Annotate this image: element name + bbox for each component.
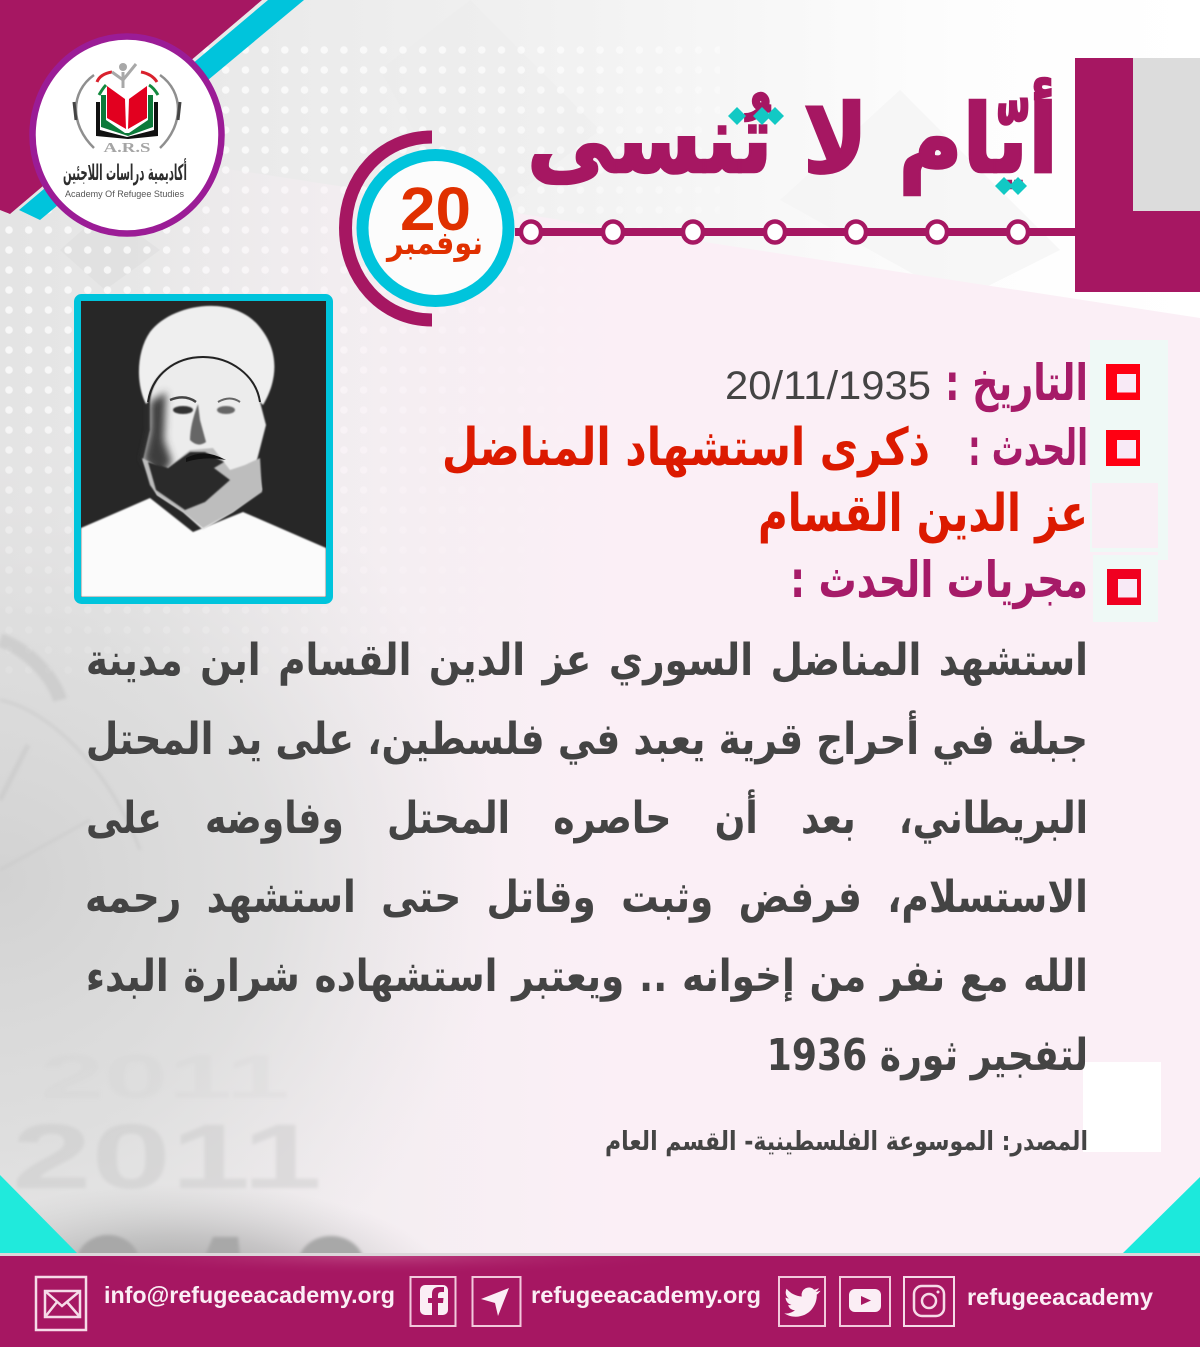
right teal triangle — [1122, 1177, 1200, 1254]
event title line 1: ذكرى استشهاد المناضل — [442, 418, 930, 478]
body line 3: البريطاني، بعد أن حاصره المحتل وفاوضه على — [86, 793, 1088, 844]
academy logo: A.R.S — [104, 141, 151, 156]
background: dotted grey and pink gradient with clock: 2011 — [12, 1106, 322, 1208]
icon: youtube — [840, 1277, 890, 1326]
date badge — [346, 137, 508, 320]
icon: telegram — [472, 1277, 520, 1326]
body line 5: الله مع نفر من إخوانه .. ويعتبر استشهاده شرارة البدء — [86, 951, 1088, 1002]
academy logo: أكاديمية دراسات اللاجئين — [63, 157, 187, 186]
event label: الحدث : — [968, 419, 1088, 477]
white patch near source — [1083, 1062, 1161, 1152]
body line 6: لتفجير ثورة 1936 — [767, 1030, 1088, 1081]
title teal diamonds — [728, 107, 1027, 195]
icon: mail — [36, 1277, 86, 1330]
body line 4: الاستسلام، فرفض وثبت وقاتل حتى استشهد رحمه — [85, 872, 1088, 923]
academy logo: Academy Of Refugee Studies — [65, 189, 184, 200]
body line 2: جبلة في أحراج قرية يعبد في فلسطين، على يد المحتل — [86, 714, 1088, 765]
top-left cyan band — [19, 0, 304, 220]
icon: instagram — [904, 1277, 954, 1326]
date label: التاريخ : — [945, 354, 1088, 413]
bullet 2 — [1106, 430, 1140, 466]
date badge: نوفمبر — [385, 224, 483, 262]
icon: twitter — [779, 1277, 825, 1326]
social handle: refugeeacademy — [967, 1284, 1153, 1310]
website: refugeeacademy.org — [531, 1282, 761, 1308]
contact email: info@refugeeacademy.org — [104, 1282, 395, 1308]
right magenta L-shape block — [1075, 58, 1200, 292]
timeline line with dots — [515, 222, 1075, 242]
date badge: 20 — [400, 175, 471, 243]
top-left magenta corner — [0, 0, 262, 214]
proceedings label: مجريات الحدث : — [790, 551, 1088, 610]
bullet background patches — [1090, 340, 1168, 622]
bullet 3 — [1107, 569, 1141, 605]
left teal triangle — [0, 1175, 78, 1254]
portrait photo — [78, 298, 330, 600]
background: dotted grey and pink gradient with clock: 2011 — [40, 1043, 290, 1112]
event title line 2: عز الدين القسام — [758, 484, 1088, 544]
footer bar — [0, 1253, 1200, 1347]
body line 1: استشهد المناضل السوري عز الدين القسام ابن مدينة — [86, 635, 1088, 686]
bullet 1 — [1106, 364, 1140, 400]
title: أيّام لا تُنسى — [527, 78, 1058, 196]
source: المصدر: الموسوعة الفلسطينية- القسم العام — [605, 1127, 1088, 1157]
academy logo — [32, 36, 222, 234]
icon: facebook — [410, 1277, 456, 1326]
date value: 20/11/1935 — [725, 364, 931, 408]
body paragraph — [85, 635, 1088, 1081]
